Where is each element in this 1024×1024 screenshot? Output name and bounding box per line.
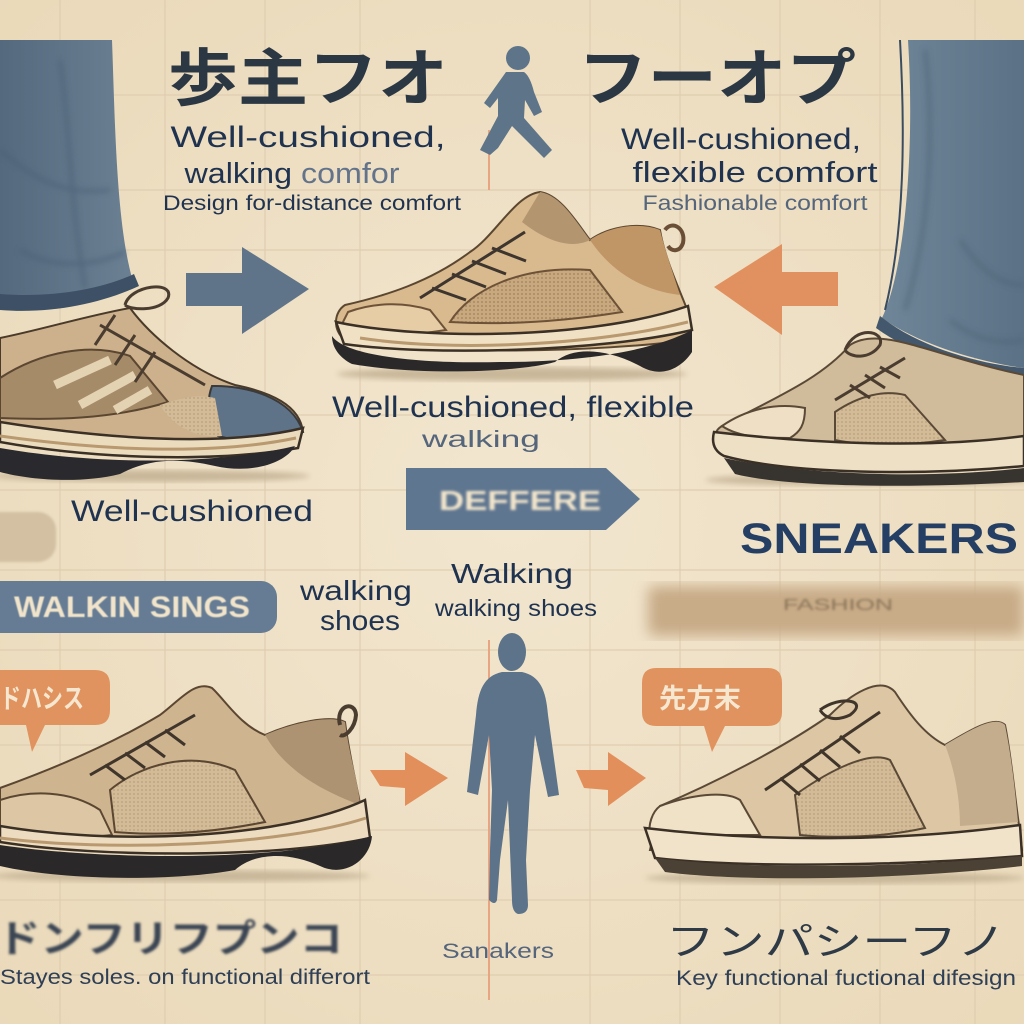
footer left caption: Stayes soles. on functional differort [0, 966, 370, 989]
blurred tag left [0, 512, 56, 562]
callout: orange right: 先方末 [659, 684, 741, 714]
right leg: jeans [876, 40, 1024, 378]
footer right caption: Key functional fuctional difesign [676, 967, 1016, 990]
left leg: jeans [0, 40, 139, 311]
footer centre label: Sanakers [442, 940, 554, 963]
text block: right heading [621, 123, 878, 215]
blurred banner right [648, 586, 1024, 636]
text block: left heading: walking comfor [183, 158, 400, 190]
text: well-cushioned flexible [332, 391, 694, 452]
label: walking shoes left [299, 575, 412, 636]
shoe: left top [0, 287, 310, 482]
arrow: orange to figure left [370, 752, 448, 806]
title: 歩主フオ [168, 45, 448, 114]
text block: right heading: Fashionable comfort [642, 192, 868, 215]
shoe: bottom left walking shoe [0, 686, 372, 882]
shoe: right top sneaker [705, 332, 1024, 486]
footer right Japanese text: フンパシーフノ [666, 922, 1006, 964]
badge: difference arrow: DEFFERE [439, 485, 601, 516]
badge: difference arrow [406, 468, 640, 530]
label: walking shoes left: shoes [320, 605, 400, 636]
text: well-cushioned flexible: Well-cushioned, flexible [332, 391, 694, 424]
icon: walking person [480, 46, 552, 158]
arrow: orange to figure right [576, 752, 646, 806]
label: walking shoes centre: Walking [451, 558, 573, 589]
text block: right heading: Well-cushioned, [621, 123, 861, 156]
icon: standing person [467, 633, 559, 914]
blurred banner right: FASHION [783, 597, 893, 614]
label: walking shoes centre [434, 558, 597, 621]
heading: sneakers: SNEAKERS [740, 515, 1018, 563]
callout: orange right [642, 668, 782, 752]
text block: left heading: Well-cushioned, [170, 121, 446, 154]
arrow: blue right [186, 247, 309, 334]
label: walking shoes centre: walking shoes [434, 595, 597, 621]
text block: right heading: flexible comfort [632, 157, 878, 189]
label: well-cushioned: Well-cushioned [71, 495, 313, 528]
shoe: bottom right sneaker [645, 686, 1024, 884]
shoe: centre walking shoe [332, 192, 692, 381]
footer left Japanese text: ドンフリフプンコ [0, 919, 343, 961]
arrow: orange left [714, 244, 838, 335]
callout: orange left: ドハシス [0, 684, 84, 714]
title [168, 45, 856, 114]
badge: walking sings: WALKIN SINGS [14, 591, 250, 624]
badge: walking sings [0, 581, 277, 633]
title: フーオプ [578, 45, 856, 114]
text block: left heading [163, 121, 461, 215]
label: walking shoes left: walking [299, 575, 412, 606]
text: well-cushioned flexible: walking [420, 426, 540, 452]
callout: orange left [0, 670, 110, 752]
text block: left heading: Design for-distance comfort [163, 192, 461, 215]
